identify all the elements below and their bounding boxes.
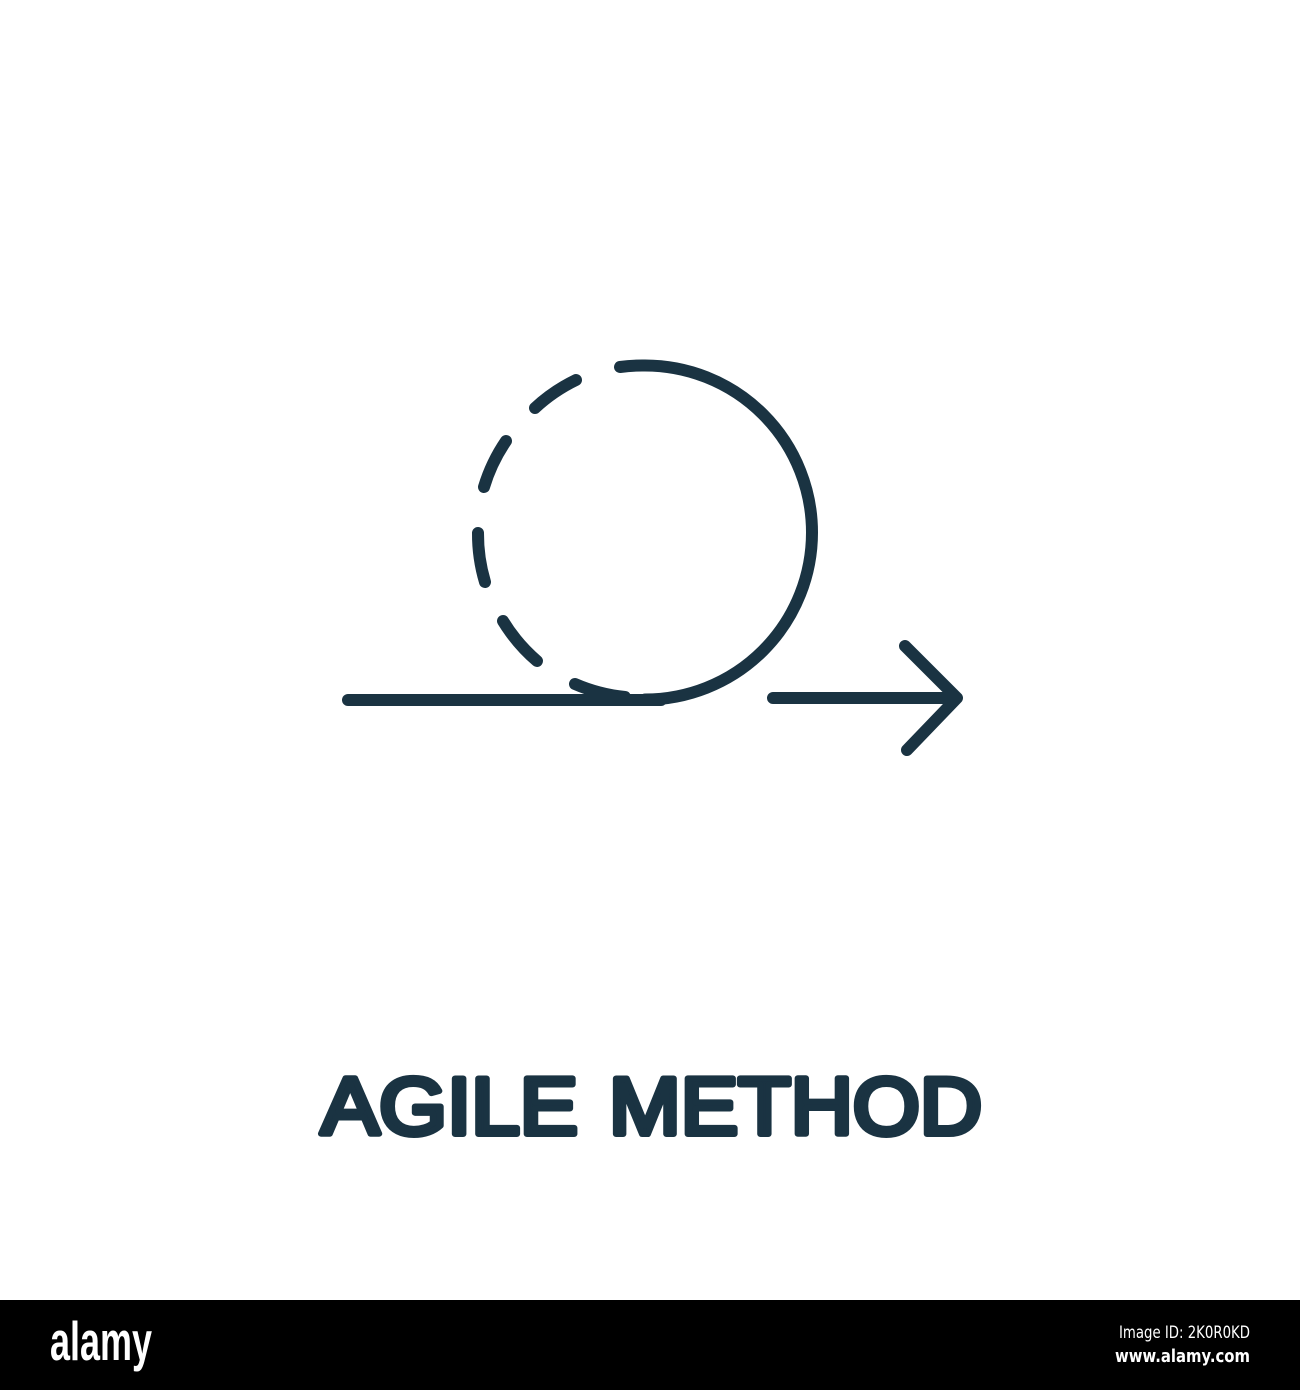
- solid half of loop: [620, 365, 812, 700]
- image id: Image ID: 2K0R0KD: [1119, 1323, 1250, 1343]
- icon: agile loop with arrow: [348, 365, 957, 750]
- website: www.alamy.com: [1115, 1346, 1250, 1367]
- baseline: [348, 694, 661, 706]
- footer logo: alamy: [50, 1310, 152, 1372]
- title: AGILE: [321, 1062, 578, 1152]
- arrow: [773, 646, 957, 750]
- title: METHOD: [609, 1062, 982, 1152]
- dashed half of loop: [478, 380, 625, 697]
- title: [321, 1062, 982, 1152]
- footer bar: [0, 1300, 1300, 1390]
